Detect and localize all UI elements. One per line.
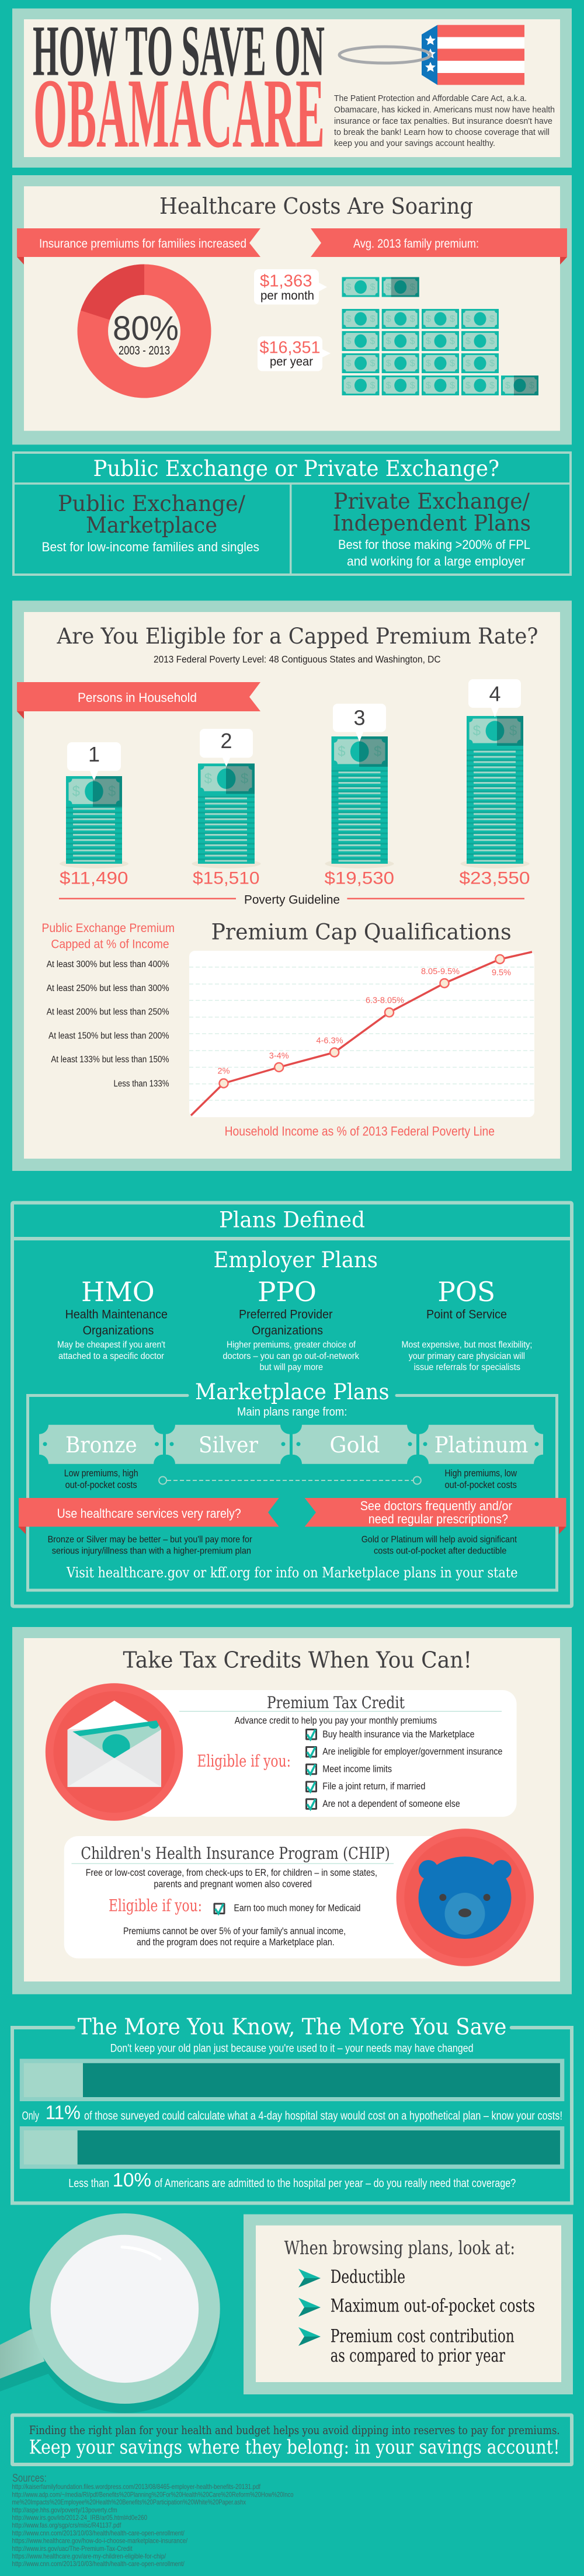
card: CHIP: Free or low-cost coverage, from check-ups to ER, for children – in some states, (86, 1867, 377, 1878)
range connector (159, 1476, 421, 1485)
sources: me%20Impacts%20Employee%20Health%20Benefits%20Participation%20White%20Paper.ashx (12, 2498, 246, 2507)
sources: http://www.irs.gov/uac/The-Premium-Tax-Credit (12, 2544, 133, 2553)
card: CHIP: Premiums cannot be over 5% of your family's annual income, (123, 1925, 346, 1937)
money: yearly bills: $ (426, 359, 431, 369)
donut chart: 80 percent: 2003 - 2013 (119, 344, 170, 357)
range text: high premiums: High premiums, low (445, 1468, 517, 1479)
ticket: platinum (419, 1425, 543, 1464)
money: yearly bills: $ (450, 381, 455, 391)
icon: envelope with money (46, 1683, 183, 1821)
ribbon: persons in household: Persons in Household (78, 690, 197, 705)
range text: high premiums (445, 1468, 517, 1490)
money: yearly bills: $ (370, 359, 376, 369)
money: yearly bills: $ (426, 381, 431, 391)
intro text: to break the bank! Learn how to choose coverage that will (334, 127, 550, 137)
card: CHIP: Eligible if you: (109, 1896, 202, 1916)
poverty guideline amounts: $15,510 (193, 869, 259, 888)
money: yearly bills: $ (370, 314, 376, 324)
money: yearly bills: $ (529, 381, 534, 391)
callout: per month (254, 269, 327, 305)
y axis labels: At least 300% but less than 400% (47, 960, 169, 969)
money stack: household of 2 (192, 729, 260, 868)
card: premium tax credit (134, 1690, 517, 1817)
poverty guideline amounts: $23,550 (459, 869, 530, 888)
sources: http://aspe.hhs.gov/poverty/13poverty.cfm (12, 2506, 117, 2514)
bar chart: 10 percent (20, 2126, 564, 2169)
money: yearly bills: $ (450, 359, 455, 369)
poverty guideline amounts: $11,490 (60, 869, 128, 888)
sources: https://www.healthcare.gov/how-do-i-choose-marketplace-insurance/ (12, 2537, 188, 2545)
heading: plans defined: Plans Defined (219, 1208, 365, 1233)
checklist item: Earn too much money for Medicaid (234, 1903, 360, 1914)
heading: marketplace plans: Marketplace Plans (195, 1379, 389, 1405)
y axis labels: Less than 133% (113, 1079, 169, 1089)
intro text (334, 93, 555, 148)
money stack: household of 4: 4 (489, 682, 501, 705)
money: yearly bills: $ (346, 359, 352, 369)
money stack: household of 3: $ (374, 743, 382, 760)
line chart: premium cap: 6.3-8.05% (366, 996, 404, 1006)
callout: per year (258, 336, 331, 371)
money stack: household of 1: $ (72, 784, 80, 799)
range text: low premiums: out-of-pocket costs (65, 1479, 137, 1490)
callout: per month: per month (260, 289, 314, 303)
money: yearly bills: $ (450, 314, 455, 324)
money: yearly bills: $ (370, 336, 376, 346)
money stack: household of 3 (325, 704, 394, 868)
ticket: bronze: Bronze (65, 1433, 137, 1458)
sources: http://www.cnn.com/2013/10/03/health/health-care-open-enrollment/ (12, 2529, 185, 2537)
stat: 10 percent: Less than (68, 2177, 109, 2190)
sources: http://www.adp.com/~/media/RI/pdf/Benefits%20Planning%20For%20Health%20Care%20Reform%20How%20Inco (12, 2490, 294, 2498)
x axis label: Household Income as % of 2013 Federal Poverty Line (225, 1124, 495, 1139)
column: PPO: PPO (258, 1276, 317, 1308)
column: HMO: May be cheapest if you aren't (57, 1340, 165, 1350)
advice: gold or platinum: costs out-of-pocket after deductible (374, 1546, 506, 1556)
money stack: household of 1: 1 (88, 742, 100, 766)
range text: high premiums: out-of-pocket costs (445, 1479, 517, 1490)
checklist item (214, 1903, 360, 1914)
heading: healthcare costs: Healthcare Costs Are Soaring (159, 193, 473, 219)
stat: 11 percent (22, 2102, 562, 2123)
column: public exchange: Public Exchange/ (58, 491, 246, 516)
money: yearly bills: $ (370, 381, 376, 391)
line chart: premium cap: 3-4% (269, 1051, 289, 1061)
stat: 10 percent (68, 2169, 516, 2191)
line chart: premium cap: 2% (218, 1066, 230, 1076)
column: public exchange (42, 491, 259, 554)
icon: bear (397, 1828, 534, 1966)
card: CHIP: parents and pregnant women also covered (154, 1878, 312, 1890)
icon: magnifying glass (0, 2213, 220, 2413)
y axis labels (47, 960, 169, 1089)
column: PPO: Organizations (252, 1324, 323, 1337)
bar chart: 11 percent (20, 2059, 564, 2101)
money: yearly bills: $ (386, 381, 391, 391)
column: private exchange: Private Exchange/ (333, 489, 530, 514)
column: public exchange: Best for low-income families and singles (42, 540, 259, 554)
poverty guideline label: Poverty Guideline (244, 894, 340, 907)
ribbon: frequent use (305, 1498, 566, 1534)
money: yearly bills: $ (386, 314, 391, 324)
subtitle: plan range: Main plans range from: (237, 1406, 347, 1419)
panel: healthcare costs (12, 175, 572, 444)
money: yearly bills: $ (450, 336, 455, 346)
column: POS: your primary care physician will (409, 1351, 525, 1361)
item: premium contribution (298, 2326, 515, 2366)
ribbon: rare use: Use healthcare services very rarely? (57, 1506, 241, 1521)
column: public exchange: Marketplace (86, 513, 217, 538)
card: premium tax credit: Premium Tax Credit (267, 1693, 405, 1712)
money stack: household of 2: $ (204, 771, 213, 787)
callout: per year: $16,351 (259, 339, 320, 357)
ribbon: rare use (18, 1498, 279, 1534)
y axis heading (41, 922, 175, 951)
stat: 10 percent: 10% (113, 2169, 151, 2191)
stat: 11 percent: Only (22, 2109, 39, 2122)
column: POS: Point of Service (426, 1308, 507, 1321)
advice: bronze or silver: Bronze or Silver may be better – but you'll pay more for (48, 1535, 252, 1545)
heading: tax credits: Take Tax Credits When You Can! (123, 1647, 472, 1673)
money: yearly bills: $ (410, 314, 415, 324)
heading: more you know: The More You Know, The More You Save (78, 2014, 506, 2040)
call to action: visit sites: Visit healthcare.gov or kff.org for info on Marketplace plans in your state (66, 1565, 517, 1581)
y axis labels: At least 150% but less than 200% (48, 1031, 169, 1041)
advice: gold or platinum (361, 1535, 517, 1556)
column: POS: POS (437, 1276, 495, 1308)
item: deductible: Deductible (331, 2266, 405, 2288)
column: PPO (223, 1276, 360, 1372)
checklist item: Are not a dependent of someone else (322, 1798, 460, 1809)
money: yearly bills: $ (489, 336, 495, 346)
column: HMO: HMO (81, 1276, 155, 1308)
y axis heading: Capped at % of Income (51, 938, 169, 951)
money stack: household of 3: 3 (353, 706, 366, 730)
subtitle: poverty level: 2013 Federal Poverty Level: 48 Contiguous States and Washington, DC (154, 654, 440, 665)
line chart: premium cap (189, 951, 534, 1117)
money: yearly bills: $ (465, 314, 471, 324)
money: yearly bills: $ (386, 359, 391, 369)
sources: http://kaiserfamilyfoundation.files.wordpress.com/2013/08/8465-employer-health-benefits-20131.pdf (12, 2483, 261, 2491)
advice: bronze or silver: serious injury/illness than with a higher-premium plan (52, 1546, 251, 1556)
heading: browsing: When browsing plans, look at: (284, 2237, 515, 2259)
money stack: household of 2: 2 (220, 729, 232, 753)
item: premium contribution: as compared to prior year (331, 2345, 505, 2366)
range text: low premiums: Low premiums, high (64, 1468, 138, 1479)
intro text: Obamacare, has kicked in. Americans must now have health (334, 105, 555, 114)
column: HMO: Health Maintenance (65, 1308, 168, 1321)
money: monthly bills: $ (410, 283, 415, 292)
money stack: household of 2: $ (241, 771, 249, 787)
card: CHIP: Children's Health Insurance Program (CHIP) (81, 1844, 390, 1863)
money: yearly bills: $ (505, 381, 510, 391)
callout: per month: $1,363 (260, 272, 312, 291)
checklist item: Are ineligible for employer/government insurance (322, 1746, 502, 1757)
column: private exchange: Independent Plans (333, 510, 531, 536)
ticket: gold (293, 1425, 416, 1464)
money: monthly bills: $ (346, 283, 352, 292)
money: yearly bills: $ (426, 336, 431, 346)
column: PPO: Preferred Provider (239, 1308, 333, 1321)
column: POS (402, 1276, 532, 1372)
line chart: premium cap: 9.5% (492, 968, 511, 978)
panel: plans defined (12, 1203, 572, 1606)
sources: http://www.irs.gov/irb/2012-24_IRB/ar05.html#d0e260 (12, 2514, 147, 2522)
money stack: household of 4 (460, 679, 529, 868)
line chart: premium cap: 4-6.3% (317, 1036, 343, 1045)
panel: the more you know (12, 2014, 572, 2203)
y axis labels: At least 200% but less than 250% (47, 1007, 169, 1017)
money: yearly bills: $ (489, 359, 495, 369)
advice: gold or platinum: Gold or Platinum will help avoid significant (361, 1535, 517, 1545)
ribbon: average premium (311, 228, 567, 265)
stat: 11 percent: 11% (46, 2102, 81, 2123)
item: premium contribution: Premium cost contribution (331, 2326, 515, 2347)
money: yearly bills: $ (410, 381, 415, 391)
column: PPO: Higher premiums, greater choice of (227, 1340, 356, 1350)
ticket: platinum: Platinum (434, 1433, 528, 1458)
money: monthly bills: $ (386, 283, 391, 292)
intro text: keep you and your savings account healthy. (334, 138, 495, 148)
money stack: household of 1: $ (108, 784, 116, 799)
panel: header (12, 8, 572, 168)
panel: marketplace plans (18, 1379, 566, 1590)
ticket: gold: Gold (329, 1433, 380, 1458)
item: deductible (298, 2266, 405, 2288)
money: yearly bills: $ (410, 336, 415, 346)
money: yearly bills: $ (465, 336, 471, 346)
donut chart: 80 percent (77, 264, 211, 398)
money stack: household of 3: $ (338, 743, 346, 760)
heading: premium cap qualifications: Premium Cap Qualifications (211, 919, 512, 945)
heading: employer plans: Employer Plans (214, 1247, 378, 1273)
heading: capped premium: Are You Eligible for a Capped Premium Rate? (57, 624, 538, 649)
panel: when browsing plans (244, 2215, 573, 2394)
intro text: The Patient Protection and Affordable Care Act, a.k.a. (334, 93, 527, 103)
money: yearly bills: $ (346, 381, 352, 391)
ribbon: persons in household (17, 682, 260, 719)
donut chart: 80 percent: 80% (113, 310, 179, 347)
ribbon: premiums increased: Insurance premiums for families increased (39, 237, 246, 251)
money stack: household of 4: $ (473, 723, 481, 739)
ribbon: average premium: Avg. 2013 family premium: (353, 237, 479, 251)
money: yearly bills: $ (489, 314, 495, 324)
icon: flag price tag (339, 25, 524, 85)
money: yearly bills: $ (465, 359, 471, 369)
checklist item (305, 1763, 392, 1775)
checklist item: Buy health insurance via the Marketplace (322, 1729, 474, 1740)
column: POS: issue referrals for specialists (414, 1362, 520, 1372)
card: premium tax credit: Eligible if you: (197, 1751, 291, 1771)
ribbon: frequent use: See doctors frequently and/or (360, 1499, 512, 1513)
panel: conclusion (12, 2415, 572, 2464)
ribbon: frequent use: need regular prescriptions? (369, 1512, 508, 1527)
line chart: premium cap: 8.05-9.5% (421, 967, 460, 976)
money stack: household of 1 (60, 742, 128, 868)
column: HMO: attached to a specific doctor (58, 1351, 165, 1361)
range text: low premiums (64, 1468, 138, 1490)
ribbon: premiums increased (17, 228, 260, 265)
heading: exchange question: Public Exchange or Private Exchange? (93, 456, 499, 481)
money: yearly bills: $ (489, 381, 495, 391)
ticket: bronze (39, 1425, 163, 1464)
callout: per year: per year (270, 355, 313, 369)
card: CHIP: and the program does not require a Marketplace plan. (137, 1937, 335, 1948)
poverty guideline amounts (60, 869, 530, 888)
ticket: silver: Silver (199, 1433, 258, 1458)
money: monthly bills: $ (370, 283, 376, 292)
money: yearly bills (342, 309, 538, 395)
sources: http://www.cnn.com/2013/10/03/health/health-care-open-enrollment/ (12, 2560, 185, 2568)
panel: public or private exchange (13, 453, 571, 575)
column: private exchange (333, 489, 531, 569)
column: private exchange: Best for those making >200% of FPL (338, 537, 530, 552)
money: yearly bills: $ (346, 336, 352, 346)
column: PPO: doctors – you can go out-of-network (223, 1351, 360, 1361)
money stack: household of 4: $ (509, 723, 517, 739)
y axis heading: Public Exchange Premium (41, 922, 175, 935)
y axis labels: At least 250% but less than 300% (47, 983, 169, 993)
column: HMO (57, 1276, 168, 1361)
sources: https://www.healthcare.gov/are-my-children-eligible-for-chip/ (12, 2552, 166, 2560)
money: yearly bills: $ (426, 314, 431, 324)
money: yearly bills: $ (386, 336, 391, 346)
money: yearly bills: $ (465, 381, 471, 391)
checklist item: Meet income limits (322, 1763, 392, 1774)
sources (12, 2472, 294, 2568)
intro text: insurance or face tax penalties. But insurance doesn't have (334, 116, 552, 126)
column: HMO: Organizations (83, 1324, 154, 1337)
sources: http://www.fas.org/sgp/crs/misc/R41137.pdf (12, 2521, 121, 2529)
card: CHIP (64, 1836, 461, 1958)
checklist item: File a joint return, if married (322, 1781, 425, 1792)
column: private exchange: and working for a large employer (347, 554, 525, 569)
column: PPO: but will pay more (259, 1362, 323, 1372)
column: POS: Most expensive, but most flexibility; (402, 1340, 532, 1350)
panel: capped premium eligibility (12, 600, 572, 1171)
money: yearly bills: $ (410, 359, 415, 369)
ticket: silver (166, 1425, 290, 1464)
y axis labels: At least 133% but less than 150% (51, 1055, 169, 1065)
money: yearly bills: $ (346, 314, 352, 324)
advice: bronze or silver (48, 1535, 252, 1556)
card: premium tax credit: Advance credit to help you pay your monthly premiums (235, 1715, 437, 1726)
money: monthly bills (342, 277, 419, 297)
panel: tax credits (12, 1627, 572, 1994)
subtitle: old plan: Don't keep your old plan just because you're used to it – your needs may have changed (110, 2043, 474, 2055)
poverty guideline amounts: $19,530 (325, 869, 394, 888)
sources: Sources: (12, 2472, 47, 2484)
